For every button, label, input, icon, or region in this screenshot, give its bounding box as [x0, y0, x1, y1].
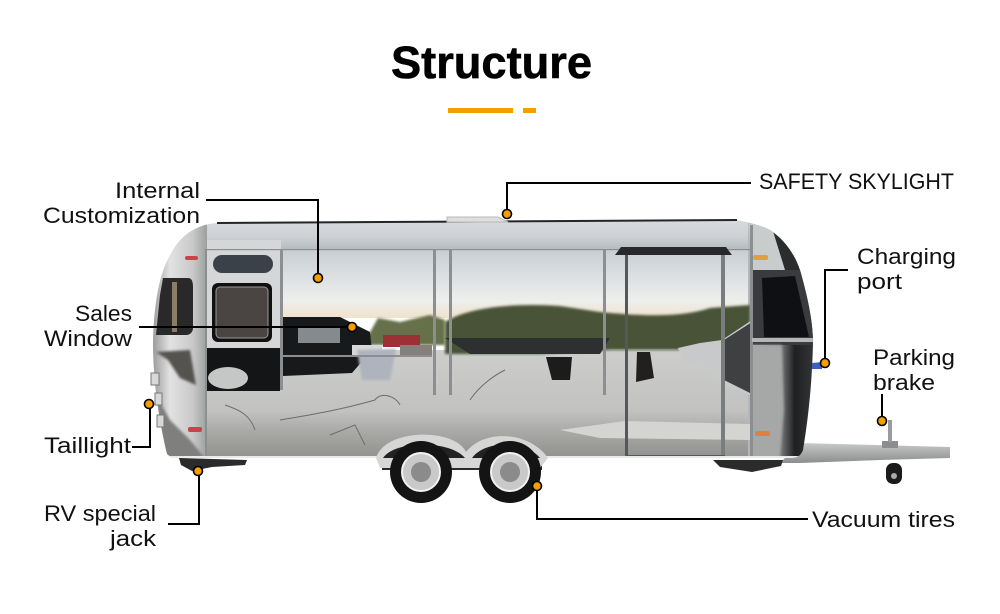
jacks and underside — [179, 458, 783, 472]
label: Internal Customization: Customization — [43, 203, 200, 228]
cracked pavement patch — [560, 421, 750, 440]
label: Internal Customization: Internal — [115, 178, 200, 203]
front window — [762, 276, 809, 337]
label: Parking brake: Parking — [873, 345, 955, 370]
axle frame — [382, 456, 542, 470]
pavement cracks — [225, 370, 505, 445]
sky band — [281, 250, 751, 318]
left cap swoosh — [156, 350, 196, 385]
label: Sales Window: Sales — [75, 301, 132, 326]
label: Sales Window: Window — [44, 326, 133, 351]
tires — [376, 435, 548, 503]
right-side vehicle reflection — [678, 320, 752, 396]
title: Structure — [391, 37, 592, 88]
panel seams — [205, 225, 753, 460]
upper pill window — [213, 255, 273, 273]
person reflections — [546, 357, 572, 380]
rear window — [156, 278, 193, 335]
label: RV special jack: jack — [109, 526, 157, 551]
roof band — [173, 220, 748, 250]
tow hitch frame — [780, 420, 950, 484]
label: Charging port — [857, 244, 956, 294]
label: SAFETY SKYLIGHT: SAFETY SKYLIGHT — [759, 169, 954, 194]
label: Charging port: port — [857, 269, 903, 294]
charging port — [812, 362, 822, 369]
label: Internal Customization — [43, 178, 200, 228]
right cap — [748, 222, 813, 458]
door — [615, 247, 732, 458]
black car reflection — [207, 348, 280, 391]
left cap — [150, 218, 207, 460]
leader lines — [132, 183, 882, 524]
label: Vacuum tires: Vacuum tires — [812, 507, 955, 532]
label: Sales Window — [44, 301, 133, 351]
label: Charging port: Charging — [857, 244, 956, 269]
label: Parking brake: brake — [873, 370, 935, 395]
ground reflection — [205, 350, 752, 460]
label: RV special jack: RV special — [44, 501, 156, 526]
tail lights — [151, 373, 164, 427]
label: RV special jack — [44, 501, 157, 551]
title accent bars — [448, 108, 536, 113]
skylight — [447, 217, 508, 222]
roof line — [217, 220, 737, 223]
marker lights — [185, 255, 770, 436]
label: Taillight: Taillight — [44, 433, 132, 458]
marker dots — [144, 210, 886, 490]
polished body — [150, 218, 820, 460]
tree reflection — [445, 305, 750, 354]
label: Parking brake — [873, 345, 955, 395]
airstream trailer — [150, 217, 950, 503]
sales window — [212, 283, 272, 342]
bottom trim — [170, 456, 798, 458]
